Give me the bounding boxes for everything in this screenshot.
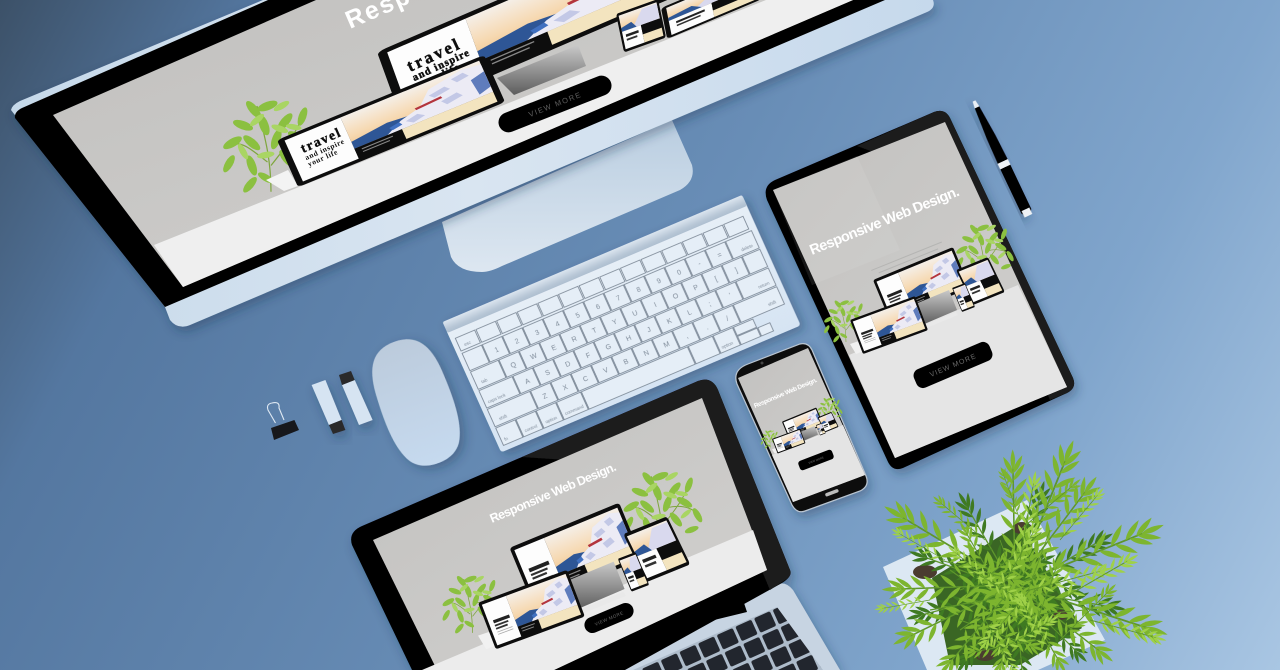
keyboard key labels: caps lock (487, 392, 507, 404)
laptop screen wall (373, 398, 767, 670)
tablet view more button: VIEW MORE (929, 353, 978, 379)
keyboard body (442, 195, 801, 452)
pen end cap (1022, 208, 1032, 218)
pen (969, 99, 1034, 218)
tablet bezel reflection (857, 111, 1074, 400)
laptop heading: Responsive Web Design. (488, 460, 618, 526)
monitor mini laptop text: travel (298, 124, 344, 156)
keyboard key labels: 1234567890-= (494, 252, 723, 354)
tablet heading: Responsive Web Design. (808, 184, 962, 259)
plant pot (883, 500, 1105, 670)
plant soil patches (913, 522, 1068, 661)
keyboard key labels (461, 224, 788, 442)
keyboard key labels: shift (498, 413, 509, 421)
monitor mini desktop text: travel (404, 34, 464, 76)
monitor mini tablet (661, 0, 762, 39)
monitor view more button (496, 73, 614, 135)
monitor view more button: VIEW MORE (527, 90, 583, 119)
pen band (998, 159, 1010, 169)
potted plant (873, 434, 1173, 670)
monitor screen floor (154, 0, 853, 287)
laptop view more button (582, 600, 636, 636)
desktop monitor (11, 0, 934, 327)
usb stick right (339, 371, 373, 425)
keyboard keys (455, 216, 793, 445)
keyboard key labels: shift (767, 299, 778, 307)
keyboard top strip (442, 195, 747, 333)
laptop bezel (351, 380, 791, 670)
phone screen wall (738, 348, 865, 502)
monitor mini laptop text: your life (306, 147, 339, 169)
keyboard key labels: delete (740, 243, 754, 252)
tablet subtitle lines (871, 242, 946, 280)
plant bright leaves (875, 434, 1173, 670)
plant highlight leaves (873, 469, 1169, 670)
tablet (766, 111, 1074, 469)
tablet view more button (911, 340, 995, 390)
phone speaker (825, 489, 839, 497)
keyboard key labels: ZXCVBNM,./ (542, 316, 730, 401)
tablet screen wall (773, 122, 1067, 458)
monitor mini desktop text (404, 32, 476, 92)
pen body (972, 105, 1032, 215)
phone view more button (797, 449, 835, 471)
laptop screen floor (422, 530, 767, 670)
usb stick left cap (329, 420, 345, 434)
monitor mini laptop (277, 55, 505, 187)
laptop bezel reflection (522, 380, 790, 590)
monitor silver frame (11, 0, 934, 327)
monitor mini plant (221, 98, 321, 195)
plant dark leaves (903, 478, 1129, 670)
tablet screen floor (849, 285, 1067, 458)
laptop (351, 380, 840, 670)
phone camera (760, 362, 764, 364)
binder clip (268, 403, 299, 440)
phone heading: Responsive Web Design. (753, 377, 819, 410)
phone body (736, 344, 867, 512)
monitor stand (442, 120, 693, 272)
wireless keyboard (442, 195, 801, 452)
keyboard key labels: fn (503, 436, 509, 442)
phone mini devices (760, 397, 843, 454)
tablet screen reflection (773, 156, 900, 285)
monitor black bezel (15, 0, 885, 307)
keyboard key labels: QWERTYUIOP[] (510, 267, 739, 370)
monitor mini laptop text: and inspire (303, 137, 346, 162)
keyboard key labels: esc (463, 339, 472, 347)
tablet bezel (766, 111, 1074, 469)
monitor mini laptop text (298, 124, 350, 169)
laptop base (623, 583, 840, 670)
keyboard key labels: tab (480, 377, 489, 384)
pen tip (972, 100, 979, 108)
usb stick left (312, 380, 345, 434)
monitor mini phone (616, 0, 666, 52)
monitor mini desktop text: and inspire (411, 47, 472, 84)
laptop keyboard (633, 607, 823, 670)
monitor mini desktop stand (497, 45, 586, 95)
usb stick right cap (339, 371, 355, 385)
keyboard key labels: option (721, 340, 734, 350)
phone screen floor (772, 425, 865, 502)
binder clip body (271, 420, 299, 440)
monitor mini pot (266, 170, 298, 191)
smartphone (736, 344, 867, 512)
phone view more button: VIEW MORE (808, 455, 825, 465)
keyboard key labels: option (545, 415, 558, 424)
keyboard key labels: control (524, 423, 538, 433)
monitor screen wall (53, 0, 853, 287)
laptop view more button: VIEW MORE (594, 610, 624, 627)
laptop mini devices (441, 470, 704, 649)
tablet mini devices (823, 223, 1015, 354)
monitor mini desktop text: your life (415, 62, 462, 92)
keyboard key labels: command (564, 404, 585, 416)
keyboard key labels: return (757, 280, 771, 290)
mouse (360, 330, 472, 475)
laptop hinge (663, 600, 747, 630)
monitor mini desktop (377, 0, 690, 115)
plant soil (932, 525, 1082, 665)
keyboard key labels: ASDFGHJKL;' (524, 293, 732, 386)
